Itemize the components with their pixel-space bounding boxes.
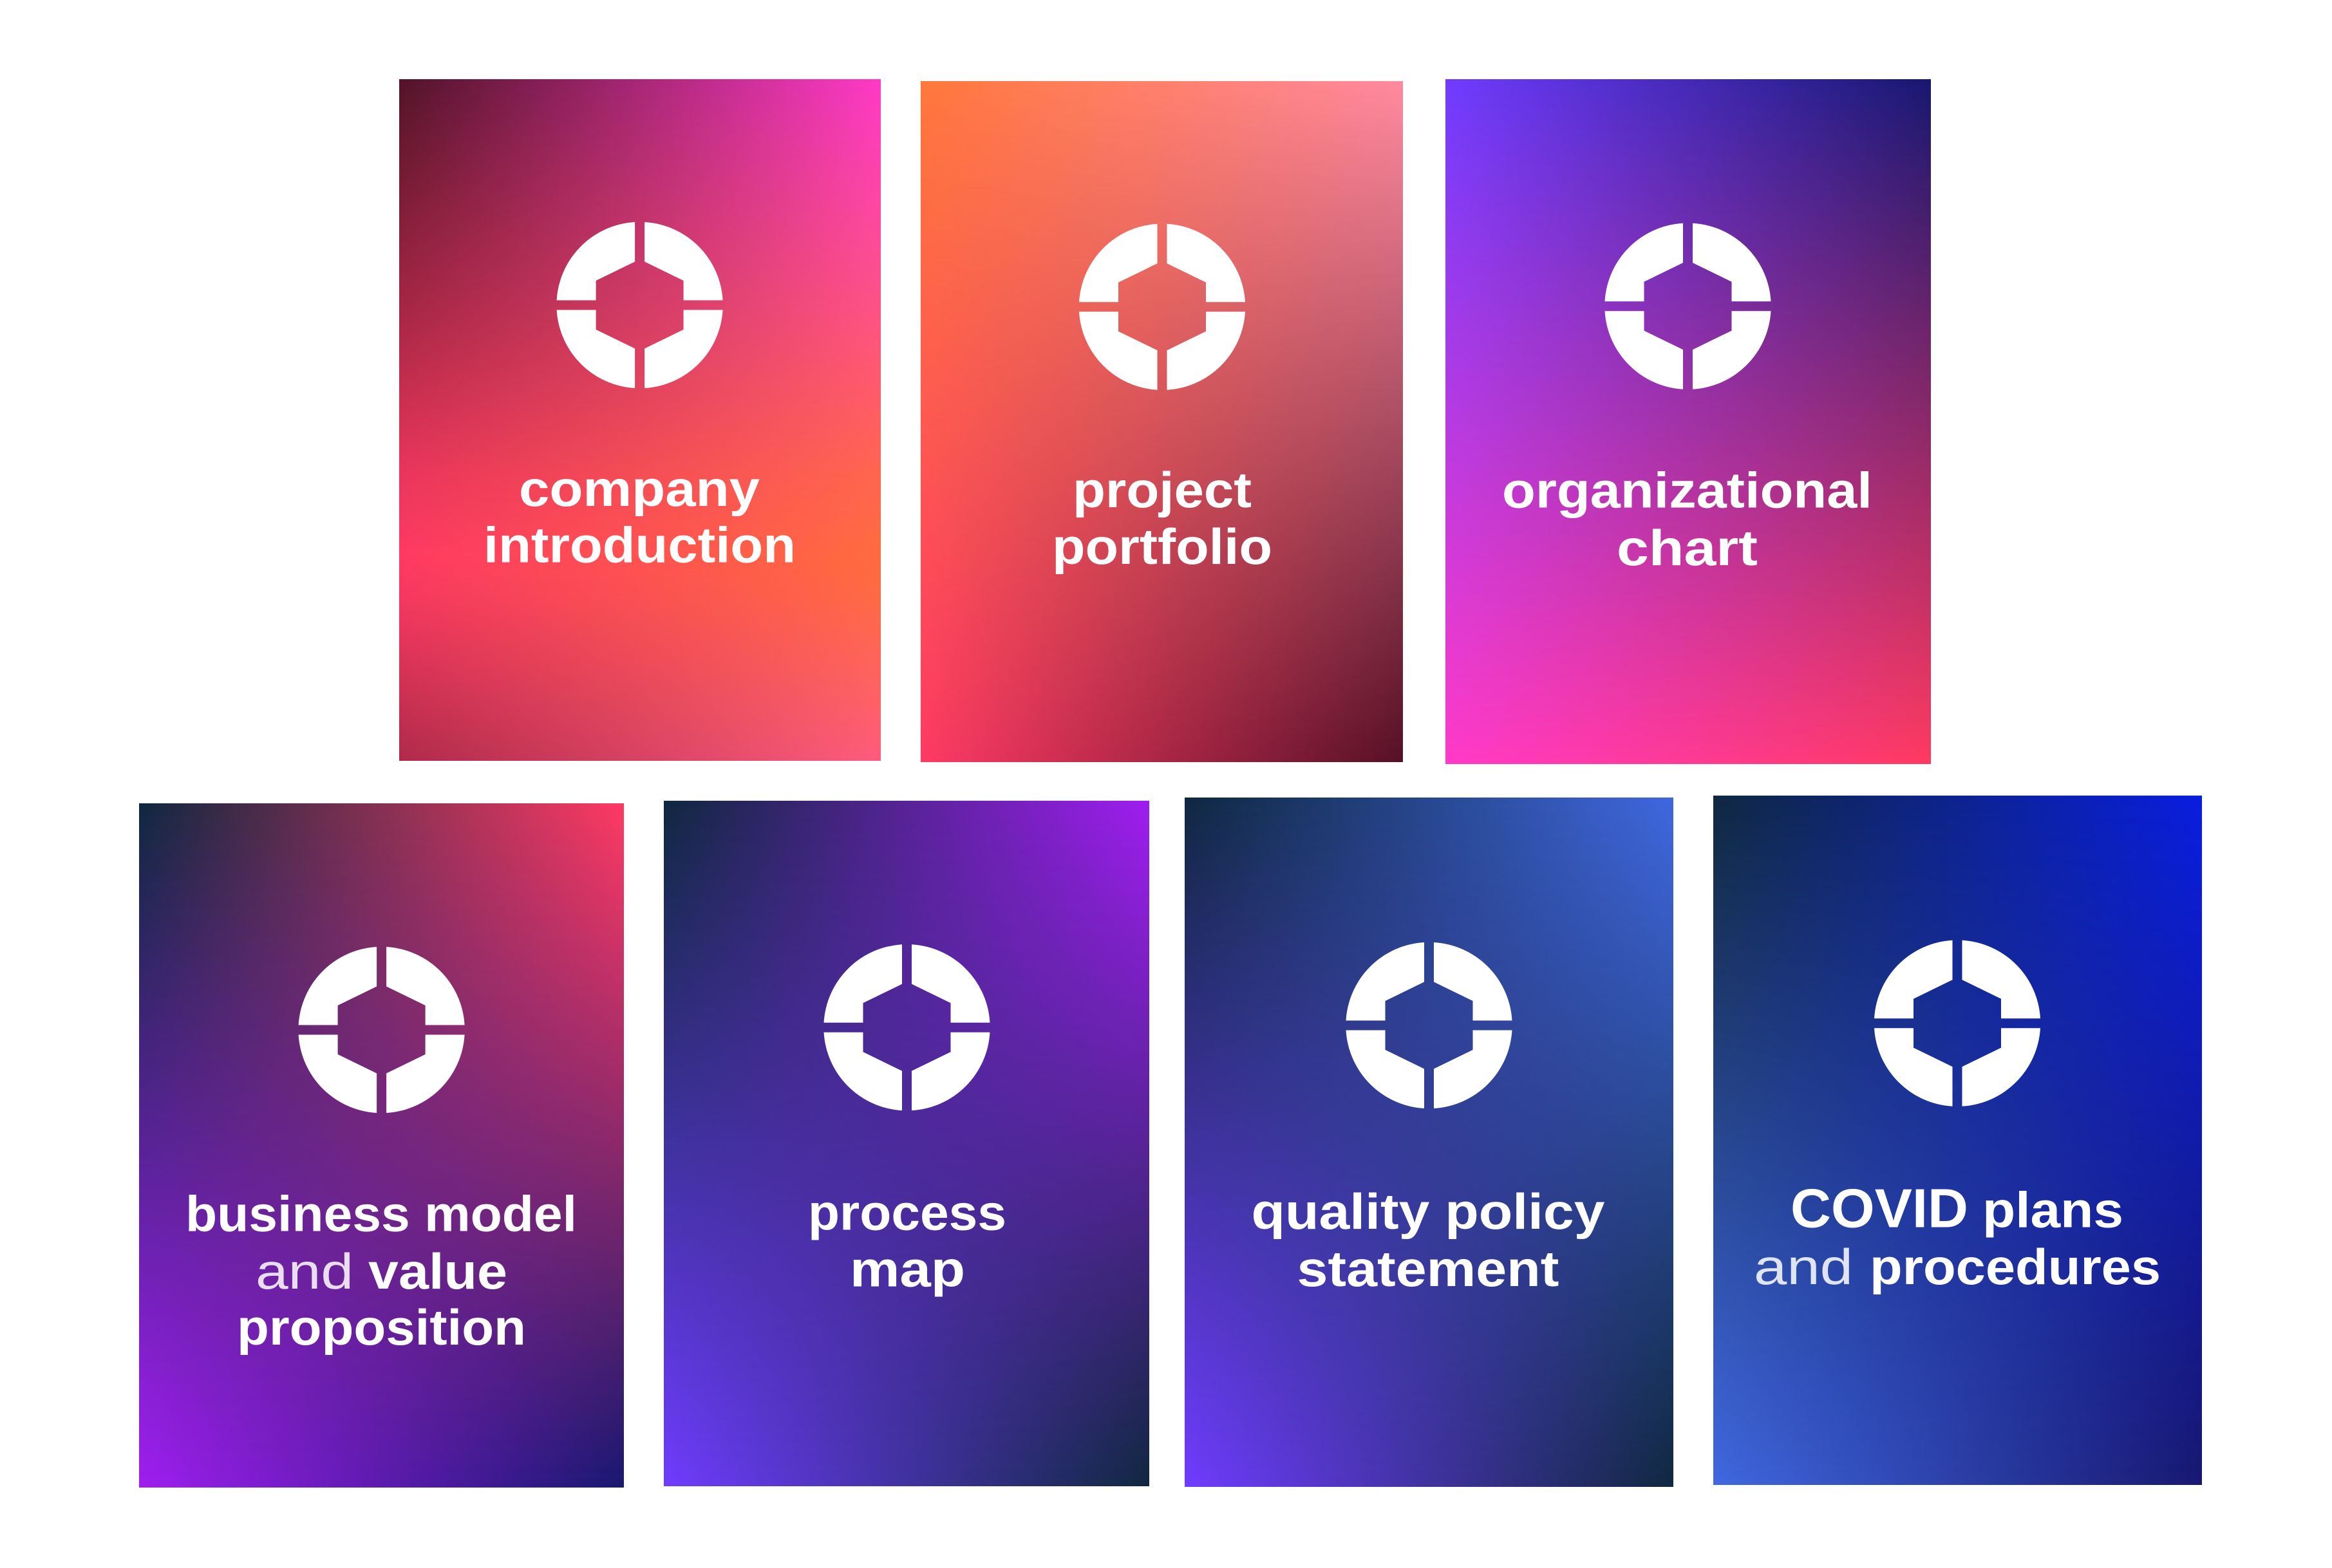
card: company introduction [399,79,881,761]
icon: logo ring [1079,224,1245,390]
card title: chart [1617,519,1758,576]
card title: quality policy [1252,1183,1604,1240]
card title [484,460,796,574]
icon: logo ring [824,944,990,1110]
card title [1502,462,1872,576]
card title: project [1073,462,1252,518]
card: organizational chart [1445,79,1931,764]
icon: logo ring [1874,940,2040,1106]
card title: process [808,1184,1006,1241]
card title: organizational [1502,462,1872,519]
card title: and [1754,1238,1853,1295]
icon: logo ring [299,947,465,1113]
card: COVID plans and procedures [1713,796,2202,1485]
card: business model and value proposition [139,803,624,1488]
card title: procedures [1870,1238,2161,1295]
card title: COVID [1791,1178,1968,1239]
card title [1052,462,1272,575]
card title: map [850,1241,965,1298]
card title: and [256,1243,353,1300]
card title [808,1184,1006,1298]
card title: plans [1982,1181,2123,1238]
card: process map [664,801,1149,1486]
icon: logo ring [557,222,723,388]
card title: proposition [237,1299,526,1356]
card title [1754,1178,2161,1295]
card title: introduction [484,517,796,574]
card title [1252,1183,1604,1297]
card title: business model [185,1186,577,1242]
card: quality policy statement [1185,798,1673,1487]
card title [185,1186,577,1356]
card title: portfolio [1052,518,1272,575]
card: project portfolio [921,81,1403,762]
icon: logo ring [1604,223,1771,389]
icon: logo ring [1346,942,1512,1108]
card title: statement [1297,1240,1559,1297]
card title: value [368,1243,507,1300]
card title: company [519,460,760,517]
